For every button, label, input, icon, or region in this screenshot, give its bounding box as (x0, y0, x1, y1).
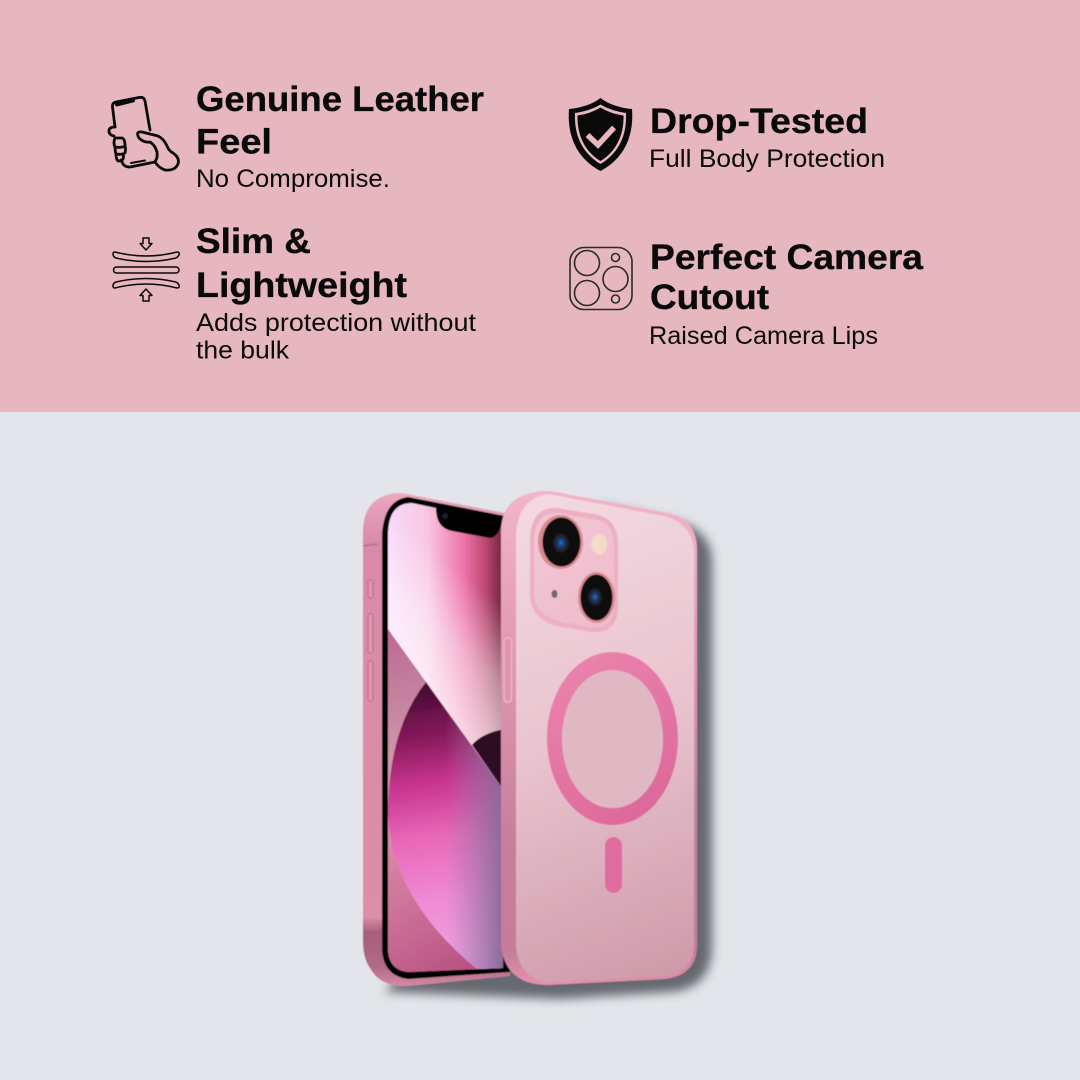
icon: hand holding phone (109, 97, 178, 170)
subtext: adds protection without the bulk: the bulk (196, 336, 290, 364)
pink feature band (0, 0, 1080, 412)
feature: perfect camera cutout (570, 237, 923, 350)
icon: shield with check (569, 98, 632, 171)
feature: genuine leather feel (109, 79, 484, 193)
case back face (516, 494, 694, 982)
main lens (538, 515, 583, 569)
subtext: adds protection without the bulk (196, 309, 476, 364)
phone frame (363, 493, 510, 986)
magnetic alignment pill (605, 837, 622, 893)
heading: slim and lightweight (196, 221, 407, 305)
feature: drop-tested (569, 98, 885, 173)
product image: pink phone and case (363, 491, 712, 999)
case drop shadow (385, 505, 712, 999)
case outer shell (501, 491, 697, 985)
heading: genuine leather feel: Genuine Leather (196, 79, 484, 119)
frame seam lines (363, 544, 378, 929)
feature: slim and lightweight (113, 221, 476, 364)
phone front view (363, 493, 510, 986)
protective case back (501, 491, 697, 985)
subtext: no compromise: No Compromise. (196, 165, 390, 193)
microphone (552, 590, 558, 598)
camera island (530, 508, 618, 632)
subtext: raised camera lips: Raised Camera Lips (649, 322, 878, 350)
phone side buttons (368, 580, 373, 701)
icon: compressed layers with arrows (113, 238, 179, 301)
black bezel (382, 497, 510, 979)
heading: slim and lightweight: Lightweight (196, 265, 407, 305)
ring inner area (562, 670, 664, 808)
screen wallpaper (385, 500, 505, 975)
front camera (442, 513, 448, 519)
icon: camera module (570, 248, 632, 310)
flash (591, 534, 607, 554)
subtext: full body protection: Full Body Protection (649, 145, 885, 173)
heading: perfect camera cutout (650, 237, 923, 317)
second lens (578, 572, 615, 623)
case side button (504, 638, 512, 702)
heading: genuine leather feel: Feel (196, 122, 272, 162)
heading: slim and lightweight: Slim & (196, 221, 311, 261)
heading: genuine leather feel (196, 79, 484, 162)
heading: drop-tested: Drop-Tested (650, 101, 868, 141)
heading: perfect camera cutout: Cutout (650, 277, 769, 317)
subtext: adds protection without the bulk: Adds protection without (196, 309, 476, 337)
heading: perfect camera cutout: Perfect Camera (650, 237, 923, 277)
magnetic ring (547, 652, 678, 825)
